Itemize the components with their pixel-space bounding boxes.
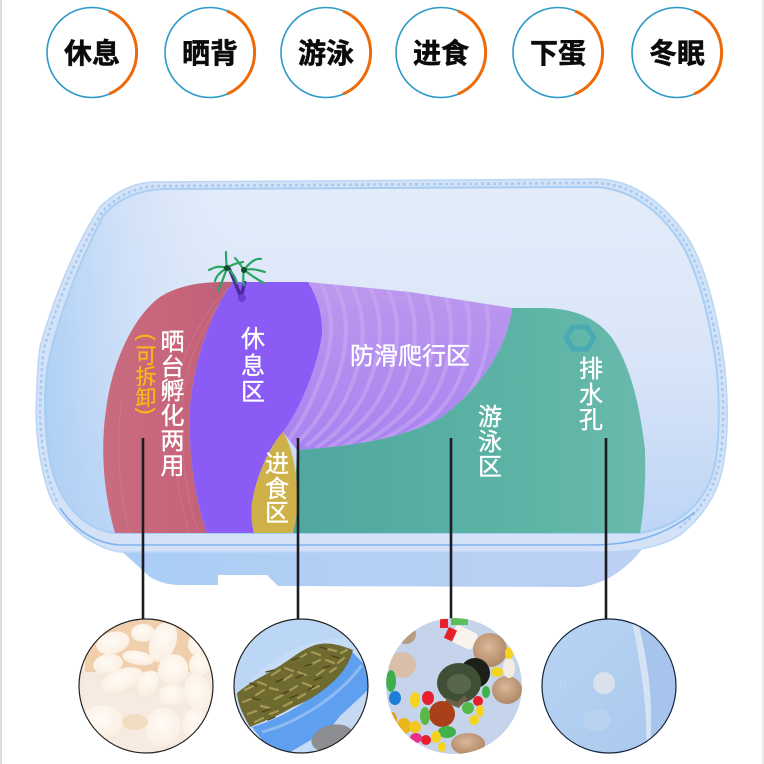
basin interior side shading: [45, 187, 719, 533]
icon row: six function badges: [47, 8, 722, 98]
label: 可拆卸: 卸: [136, 387, 156, 410]
label: 防滑爬行区: 防滑爬行区: [350, 343, 470, 370]
icon: palm tree: [209, 252, 265, 302]
label: 进食区: 食: [265, 476, 289, 503]
zone: swimming area: [293, 308, 645, 533]
badge: 冬眠: [632, 8, 722, 98]
badge: 休息: [47, 8, 137, 98]
label: 排水孔: 水: [579, 382, 603, 409]
leader lines: [143, 438, 606, 619]
badge: 下蛋: 下蛋: [530, 38, 586, 69]
label: 排水孔: 排: [579, 356, 603, 383]
label: 晒台孵化两用: 孵: [160, 378, 184, 405]
zone: resting area: [190, 282, 322, 533]
badge: 晒背: 晒背: [182, 38, 238, 69]
badge: 晒背: [165, 8, 255, 98]
photo: turtle food pellets in dish: [234, 619, 368, 760]
basin rim stroke detail: [40, 183, 723, 530]
label: 可拆卸: 可: [136, 345, 156, 368]
zone: basking platform: [103, 282, 233, 534]
label: 休息区: [241, 326, 265, 406]
badge: 游泳: 游泳: [298, 38, 354, 69]
label: 进食区: [265, 451, 289, 527]
label: 休息区: 区: [241, 379, 265, 406]
basin base foot: [118, 545, 645, 587]
label: 晒台孵化两用: 台: [160, 354, 184, 381]
icon: drain hexagon: [566, 327, 594, 349]
label: 可拆卸: ): [134, 408, 158, 414]
label: 进食区: 进: [265, 451, 289, 478]
label: 可拆卸: [134, 334, 158, 414]
label: 可拆卸: 拆: [136, 366, 156, 389]
label: 进食区: 区: [265, 500, 289, 527]
label: 游泳区: [478, 404, 502, 481]
badge: 休息: 休息: [64, 38, 120, 69]
badge: 进食: 进食: [413, 38, 469, 69]
label: 休息区: 息: [241, 353, 265, 380]
badge: 冬眠: 冬眠: [649, 38, 705, 69]
basin rim outer: [36, 179, 727, 552]
basin front rim line: [60, 508, 695, 545]
photo: white pebbles: [79, 618, 216, 760]
photo: drain hole close-up: [542, 619, 680, 753]
zone: anti-slip climbing ramp: [283, 282, 512, 450]
turtle basin diagram: [36, 179, 727, 587]
label: 排水孔: [579, 356, 603, 434]
label: 游泳区: 游: [478, 404, 502, 431]
basin interior: [45, 187, 719, 533]
label: 晒台孵化两用: 两: [160, 428, 184, 455]
label: 游泳区: 区: [478, 454, 502, 481]
label: 排水孔: 孔: [579, 407, 603, 434]
label: 晒台孵化两用: 晒: [160, 329, 184, 356]
badge: 游泳: [281, 8, 371, 98]
label: 晒台孵化两用: 用: [160, 453, 184, 480]
label: 晒台孵化两用: 化: [160, 403, 184, 430]
label: 休息区: 休: [241, 326, 265, 353]
label: 晒台孵化两用: [160, 329, 184, 480]
photo: turtle on coloured gravel: [386, 618, 522, 755]
label: 游泳区: 泳: [478, 429, 502, 456]
label: 可拆卸: (: [134, 334, 158, 340]
zone: feeding area: [252, 432, 297, 533]
badge: 进食: [396, 8, 486, 98]
badge: 下蛋: [513, 8, 603, 98]
